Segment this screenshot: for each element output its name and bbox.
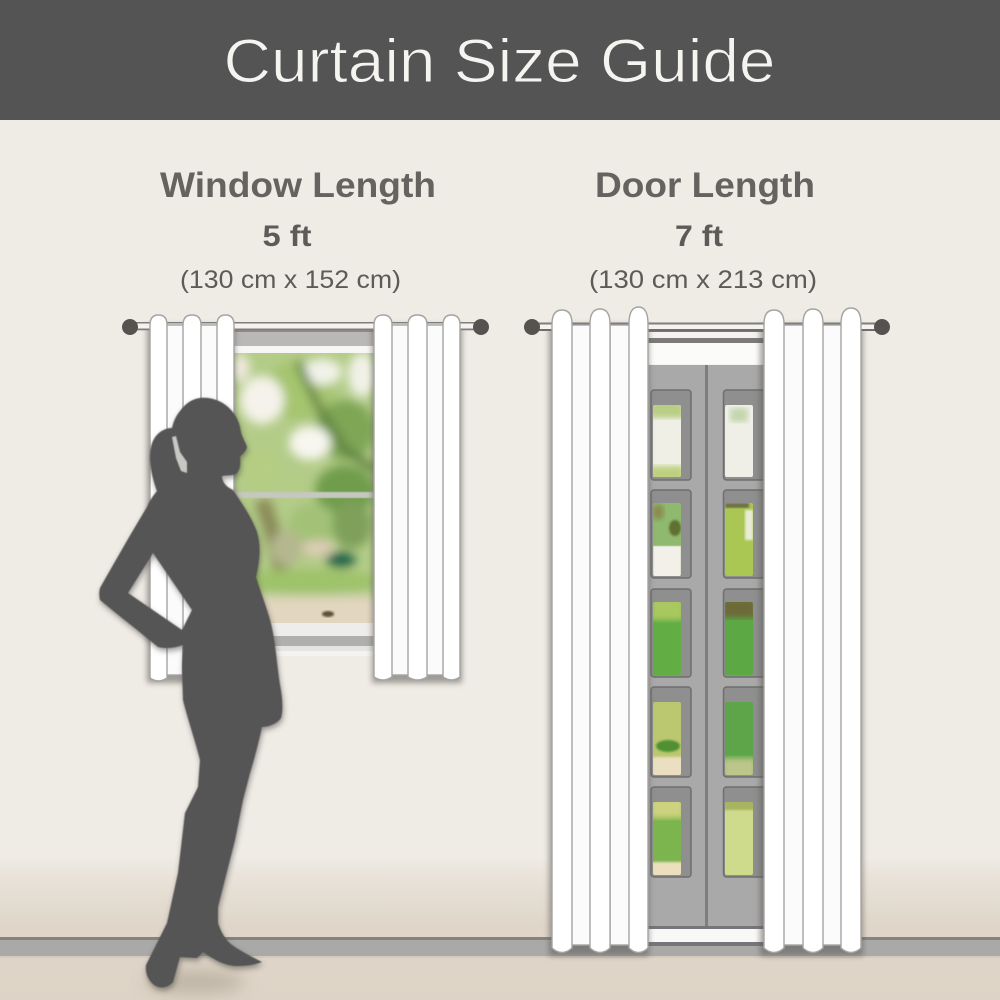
window view: blurred garden xyxy=(230,353,380,631)
door panels row 2 xyxy=(651,490,766,578)
silhouette: woman xyxy=(99,398,283,990)
heading: window length: Window Length xyxy=(160,166,436,205)
heading: window length xyxy=(160,166,436,294)
heading: door length xyxy=(589,166,817,294)
heading: door length: (130 cm x 213 cm) xyxy=(589,266,817,294)
window xyxy=(230,323,380,656)
hair gap highlight xyxy=(172,436,187,473)
curtain: window left xyxy=(150,315,234,681)
title: Curtain Size Guide xyxy=(224,27,776,95)
door panels row 3 xyxy=(650,589,766,677)
heading: door length: Door Length xyxy=(595,166,815,205)
curtain rod: door xyxy=(524,319,890,335)
heading: door length: 7 ft xyxy=(675,220,723,253)
door leaves xyxy=(648,365,764,926)
heading: window length: (130 cm x 152 cm) xyxy=(180,266,401,294)
heading: window length: 5 ft xyxy=(262,220,312,253)
floor shadow under feet xyxy=(145,970,245,994)
curtain rod: window xyxy=(122,319,489,335)
door xyxy=(648,323,766,955)
baseboard xyxy=(0,937,1000,958)
door frame xyxy=(648,323,764,955)
header banner xyxy=(0,0,1000,120)
rod finial right xyxy=(473,319,489,335)
door panels row 1 xyxy=(650,390,766,482)
curtain: door left xyxy=(552,307,648,952)
rod finial left xyxy=(524,319,540,335)
curtain: window right xyxy=(374,315,460,680)
rod finial right xyxy=(874,319,890,335)
door panels row 4 xyxy=(650,687,766,782)
window frame xyxy=(234,323,374,656)
door panels row 5 xyxy=(650,787,766,878)
rod finial left xyxy=(122,319,138,335)
curtain: door right xyxy=(764,308,861,952)
curtain shadows xyxy=(147,325,863,956)
